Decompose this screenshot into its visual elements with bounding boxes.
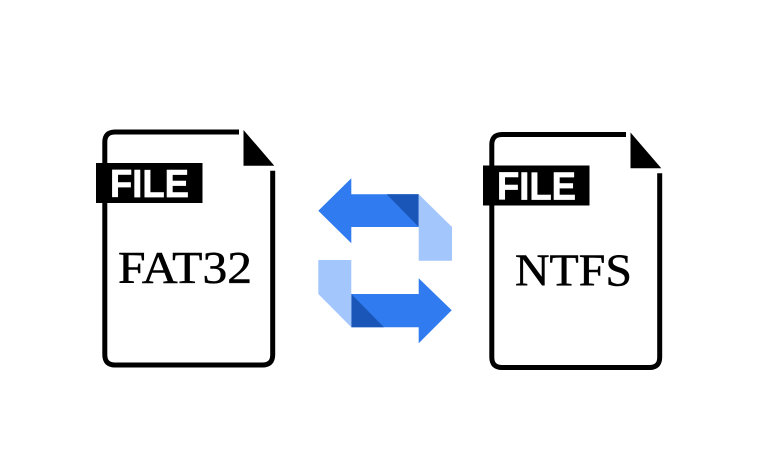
arrow: pointing left: [318, 178, 452, 261]
folded corner: [244, 130, 274, 166]
file label: FILE: [110, 163, 189, 206]
conversion arrows: [318, 178, 452, 343]
arrow: pointing right: [318, 260, 452, 343]
document outline: [492, 134, 660, 368]
document outline: [105, 132, 273, 365]
folded corner: [630, 132, 661, 168]
format name: NTFS: NTFS: [515, 246, 632, 296]
file label: FILE: [497, 166, 576, 208]
file icon: NTFS: [483, 132, 661, 368]
format name: FAT32: FAT32: [118, 243, 252, 293]
file icon: FAT32: [96, 130, 274, 365]
